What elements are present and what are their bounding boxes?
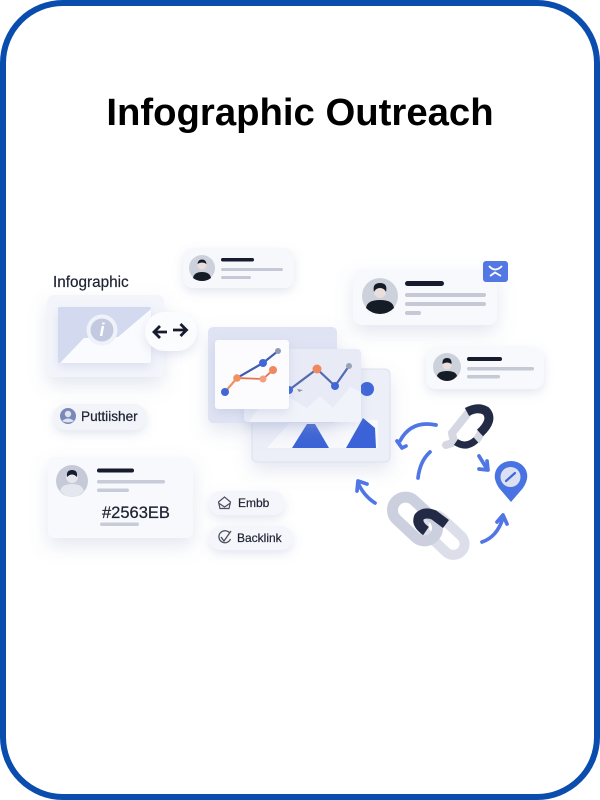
panel: back chart [208,327,337,423]
icon: info circle: i [99,320,105,340]
title: Infographic Outreach [106,91,494,134]
icon: backlink check [219,531,231,543]
label: Infographic: Infographic [53,274,129,291]
panel: publisher pill: Puttiisher [81,409,138,424]
panel: backlink pill: Backlink [237,531,283,545]
icon: bottom chain link [387,492,469,559]
panel: right profile card [353,269,497,325]
line chart [285,363,352,394]
mountains [267,418,378,448]
icon: publisher avatar [60,408,76,424]
panel: small profile card [426,347,544,389]
panel: publisher pill [53,404,147,430]
icon: exchange arrows pill [145,312,197,351]
panel: envelope card [47,295,164,377]
icon: avatar [56,465,88,497]
panel: embed pill [209,491,285,515]
panel: embed pill: Embb [238,496,270,510]
icon: sun [360,382,374,396]
panel: front chart [215,340,289,409]
panel: image card [252,369,390,462]
icon: embed envelope [218,497,230,508]
panel: middle chart [244,349,361,422]
icon: top chain link [446,409,489,445]
line chart [221,348,281,396]
panel: color code card [48,457,193,538]
icon: blue badge [483,261,508,282]
cycle arrows [357,424,507,542]
illustration [47,248,544,559]
panel: color code card: #2563EB [102,504,170,522]
icon: avatar [189,255,215,281]
icon: avatar [362,278,398,314]
panel: backlink pill [209,526,293,550]
icon: map pin [495,461,527,502]
panel: top profile card [183,248,294,288]
icon: avatar [433,353,461,381]
icon: envelope [58,307,151,363]
